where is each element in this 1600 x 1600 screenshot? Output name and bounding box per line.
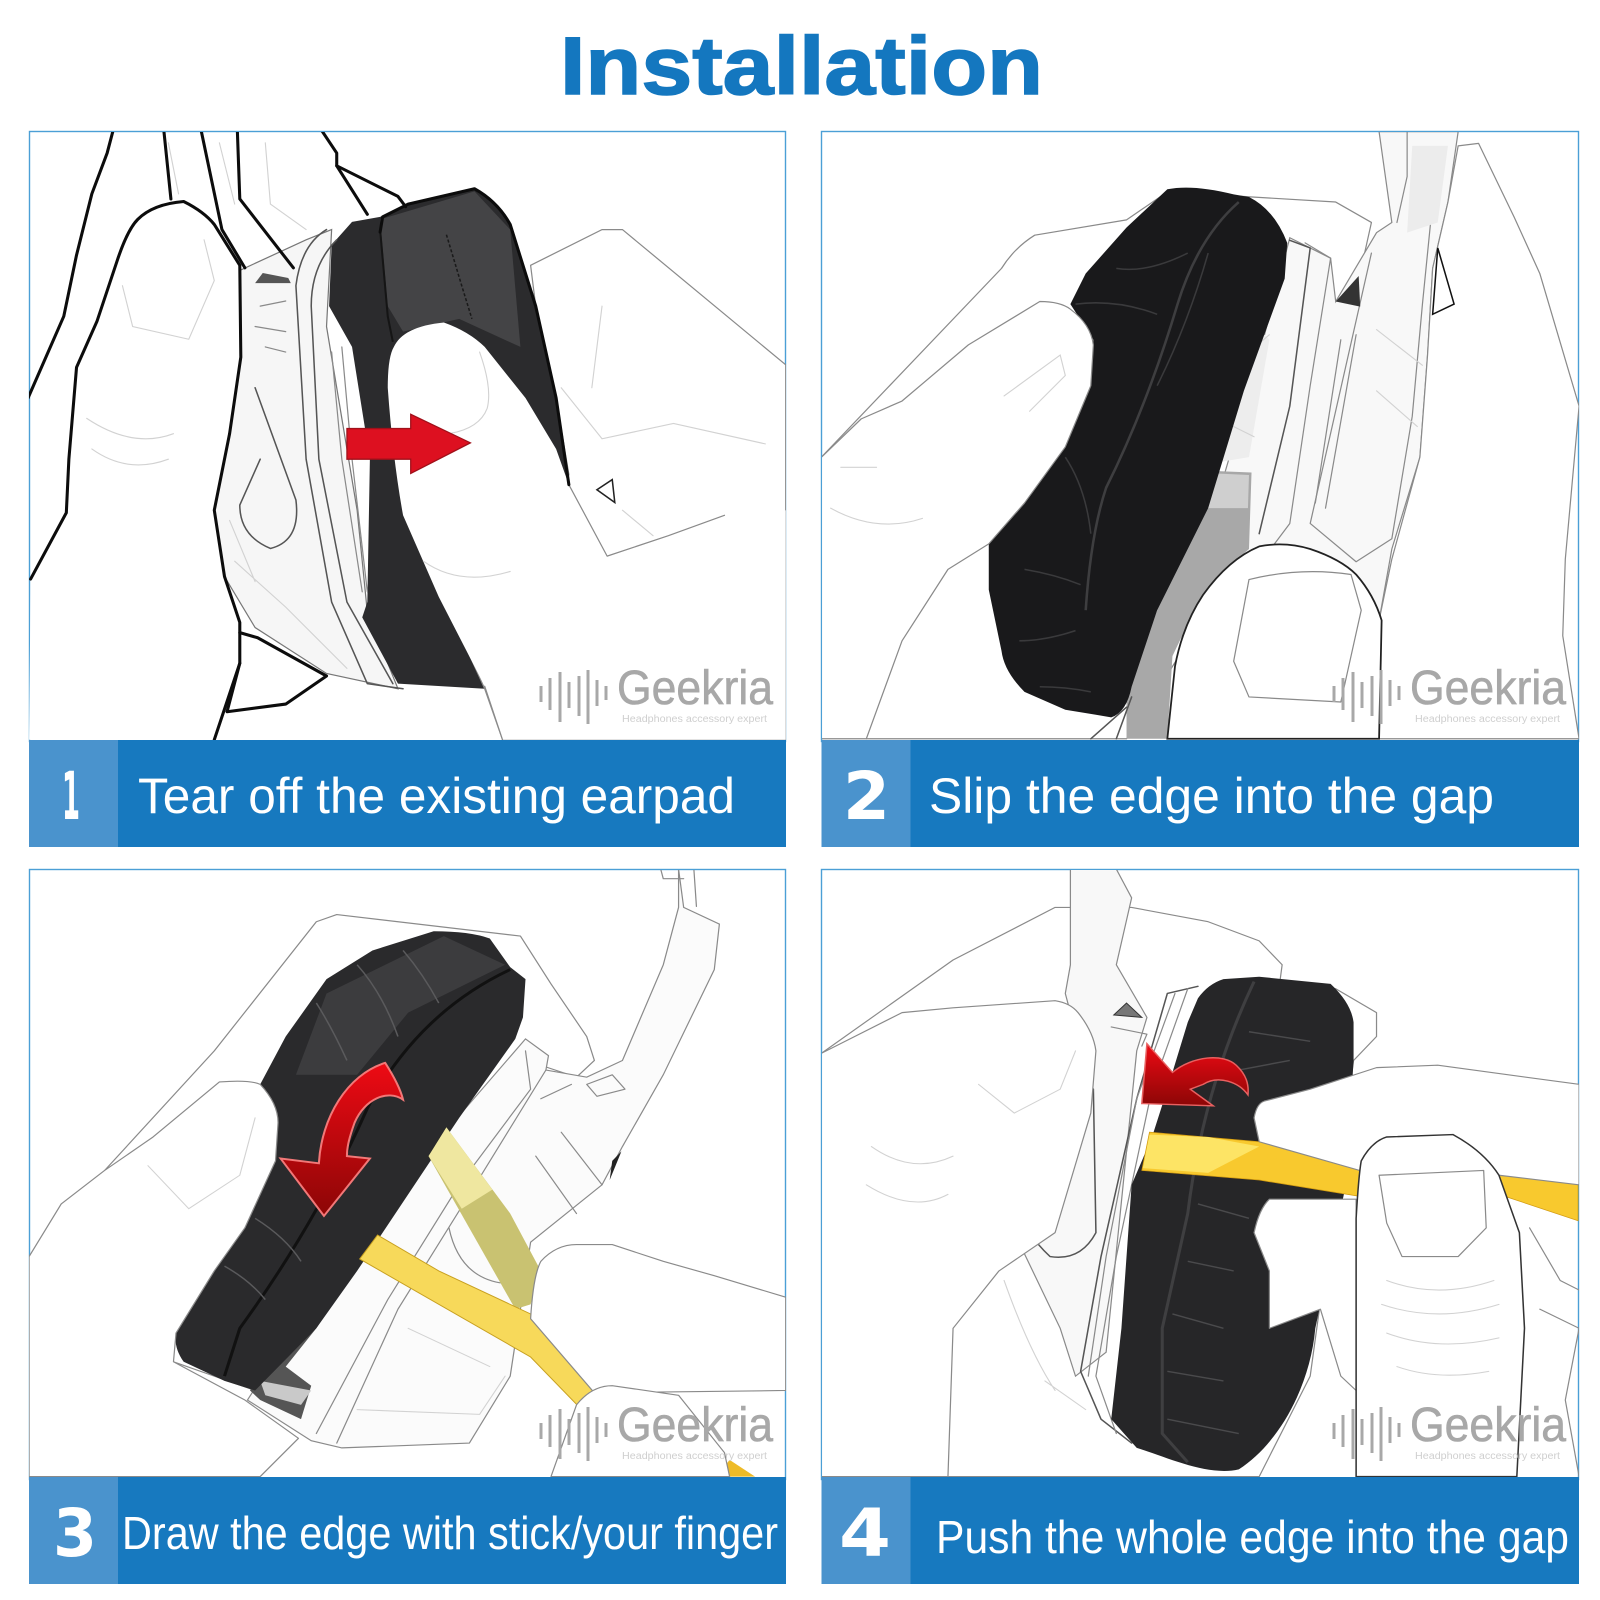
heavy sketch outlines	[28, 124, 569, 740]
headphone shell and band	[1182, 132, 1459, 638]
panel frame	[822, 870, 1578, 1480]
earpad rim shine	[1086, 202, 1239, 610]
headphone detail lines	[316, 869, 696, 1443]
metal plate lighter area	[1208, 474, 1249, 508]
illustration: pushing the whole edge in	[821, 869, 1579, 1477]
metal plate	[250, 1324, 319, 1420]
rear hand	[102, 915, 594, 1390]
arrow: pull right	[347, 414, 470, 473]
earpad wrinkles	[1019, 253, 1208, 692]
earpad highlight	[380, 191, 520, 347]
step number badge	[822, 1477, 910, 1584]
metal plate dark grey	[1127, 470, 1252, 739]
panel: step 2	[821, 132, 1579, 847]
illustration: drawing the edge with a stick	[29, 869, 786, 1477]
translucent stick pale part	[429, 1127, 492, 1209]
left hand fingernail	[866, 1051, 1076, 1202]
finger detail	[831, 355, 1065, 524]
logo name: Geekria	[617, 662, 773, 715]
headband	[1014, 869, 1147, 1376]
thumb lines	[423, 306, 765, 740]
caption banner	[822, 1477, 1579, 1584]
headphone shell shading	[214, 230, 398, 689]
panel frame	[30, 132, 786, 742]
left finger nail	[148, 1118, 255, 1209]
left hand fill	[29, 336, 240, 740]
thumb pressing the earpad	[388, 322, 786, 740]
metal plate light	[1222, 334, 1269, 462]
panel frame	[822, 132, 1578, 742]
thumb	[1356, 1135, 1524, 1477]
panel: step 3	[29, 869, 786, 1584]
earpad	[989, 188, 1287, 717]
logo sound bars	[1334, 1407, 1399, 1461]
right hand	[1379, 143, 1579, 739]
rim and frame lines	[1213, 132, 1448, 562]
earpad fold	[380, 230, 393, 342]
caption banner	[29, 1477, 786, 1584]
panel: step 1	[28, 124, 786, 847]
logo tagline: Headphones accessory expert	[622, 714, 767, 725]
earpad seam	[446, 235, 472, 319]
earpad rim	[224, 970, 510, 1376]
right hand crease	[1433, 248, 1454, 314]
right lower finger	[551, 1386, 730, 1477]
earpad top shine	[296, 936, 505, 1075]
rear hand	[821, 907, 1377, 1477]
yellow stick light tip	[1143, 1135, 1259, 1173]
step number badge	[29, 740, 118, 847]
step number badge	[29, 1477, 118, 1584]
step number: 4	[839, 1495, 891, 1572]
translucent stick behind	[429, 1127, 541, 1309]
logo tagline: Headphones accessory expert	[622, 1451, 767, 1462]
thumb nail	[1234, 572, 1361, 702]
step caption: Push the whole edge into the gap	[936, 1511, 1569, 1563]
curved arrow	[281, 1063, 403, 1216]
step caption: Slip the edge into the gap	[929, 768, 1494, 824]
earpad inner rim	[1162, 982, 1254, 1462]
left hand	[29, 1081, 298, 1477]
panel frame	[30, 870, 786, 1480]
logo name: Geekria	[617, 1399, 773, 1452]
back of hand	[821, 192, 1371, 739]
logo tagline: Headphones accessory expert	[1415, 714, 1560, 725]
watermark: Geekria	[541, 662, 773, 725]
watermark: Geekria	[1334, 1399, 1566, 1462]
panel: step 1: 1	[62, 758, 80, 835]
logo name: Geekria	[1410, 1399, 1566, 1452]
thumb nail and wrinkles	[1379, 1170, 1579, 1477]
caption banner	[29, 740, 786, 847]
index finger above stick	[1254, 1065, 1579, 1185]
illustration: slipping the edge into the gap	[821, 132, 1579, 739]
earpad	[176, 931, 526, 1390]
logo sound bars	[1334, 670, 1399, 724]
headphone band	[247, 869, 719, 1448]
palm finger block	[1254, 1199, 1356, 1390]
step number badge	[822, 740, 910, 847]
earpad inner folds	[1167, 1032, 1310, 1434]
earpad folds	[224, 950, 439, 1300]
caption banner	[822, 740, 1579, 847]
logo sound bars	[541, 1407, 606, 1461]
logo tagline: Headphones accessory expert	[1415, 1451, 1560, 1462]
metal plate highlight	[260, 1381, 311, 1405]
title: Installation	[560, 21, 1043, 112]
earpad being removed	[329, 189, 569, 689]
stick end	[717, 1460, 755, 1477]
logo name: Geekria	[1410, 662, 1566, 715]
left finger	[821, 302, 1093, 739]
stick over fingertip	[1259, 1156, 1377, 1198]
watermark: Geekria	[1334, 662, 1566, 725]
headphone rim	[1004, 986, 1198, 1443]
step number: 3	[53, 1495, 97, 1572]
step caption: Tear off the existing earpad	[138, 768, 735, 824]
right upper hand	[531, 1245, 786, 1393]
step number: 2	[843, 758, 890, 835]
left hand	[821, 1001, 1096, 1477]
cable stub	[1091, 697, 1132, 739]
curved arrow	[1142, 1044, 1248, 1106]
earpad	[1111, 977, 1354, 1471]
illustration: tearing off the earpad	[28, 124, 786, 740]
panel: step 4	[821, 869, 1579, 1584]
step caption: Draw the edge with stick/your finger	[122, 1507, 778, 1559]
headphone rim	[230, 230, 403, 689]
yellow stick	[1142, 1132, 1578, 1221]
thumb	[1167, 544, 1382, 739]
watermark: Geekria	[541, 1399, 773, 1462]
right hand back	[439, 230, 786, 740]
logo sound bars	[541, 670, 606, 724]
yellow stick	[360, 1235, 594, 1410]
